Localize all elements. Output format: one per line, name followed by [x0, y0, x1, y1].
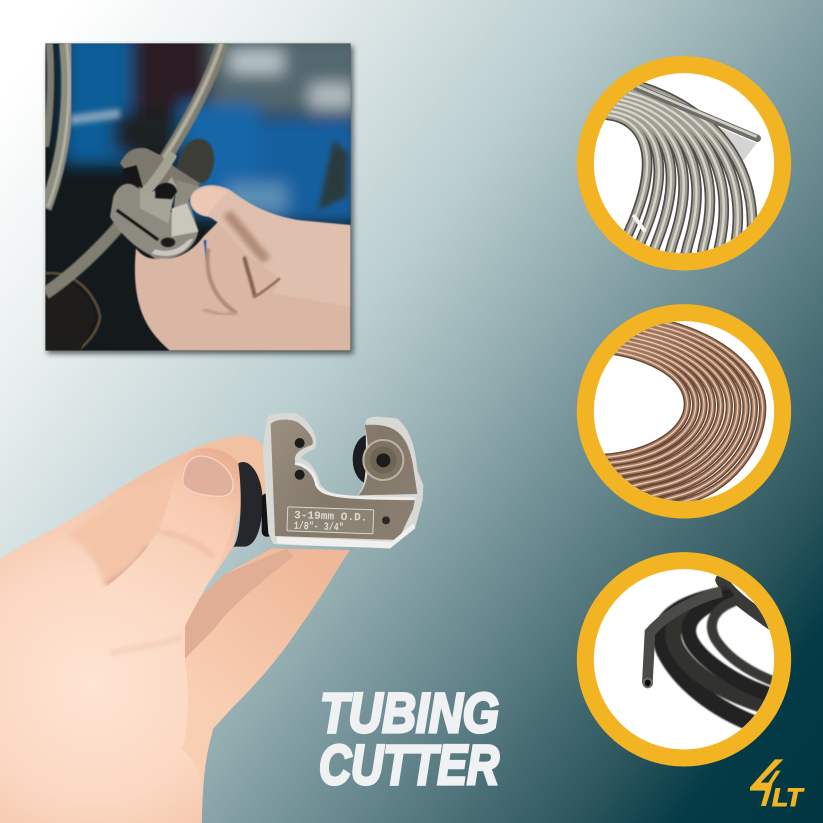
circle: steel tubing — [585, 65, 783, 270]
title: tubing cutter: TUBING — [320, 681, 499, 744]
tube end emerging from cutter — [143, 153, 173, 195]
photo: cutter in use on a tube — [45, 33, 363, 354]
cutter body — [110, 148, 200, 260]
middle and ring fingers — [157, 548, 350, 823]
circle: copper tubing — [583, 313, 783, 510]
stamped size markings: 1/8"- 3/4" — [294, 521, 344, 534]
logo: 4LT: LT — [772, 785, 804, 812]
cutter blade wheel — [353, 435, 386, 484]
cutter knob — [173, 139, 214, 183]
palm and index finger — [0, 436, 267, 823]
logo: 4LT — [750, 759, 804, 812]
thumb — [95, 448, 242, 630]
circle: black coated tubing — [585, 561, 783, 758]
tube through cutter — [45, 43, 223, 293]
tubing cutter body — [263, 413, 423, 548]
hand holding the tubing cutter — [0, 413, 423, 823]
stamped size markings: 3-19mm O.D. — [294, 510, 368, 525]
hand holding cutter — [135, 185, 351, 351]
title: tubing cutter: CUTTER — [319, 733, 499, 796]
title: tubing cutter — [319, 681, 499, 796]
cutter black knob — [233, 462, 263, 547]
left coiled tube — [45, 43, 69, 208]
